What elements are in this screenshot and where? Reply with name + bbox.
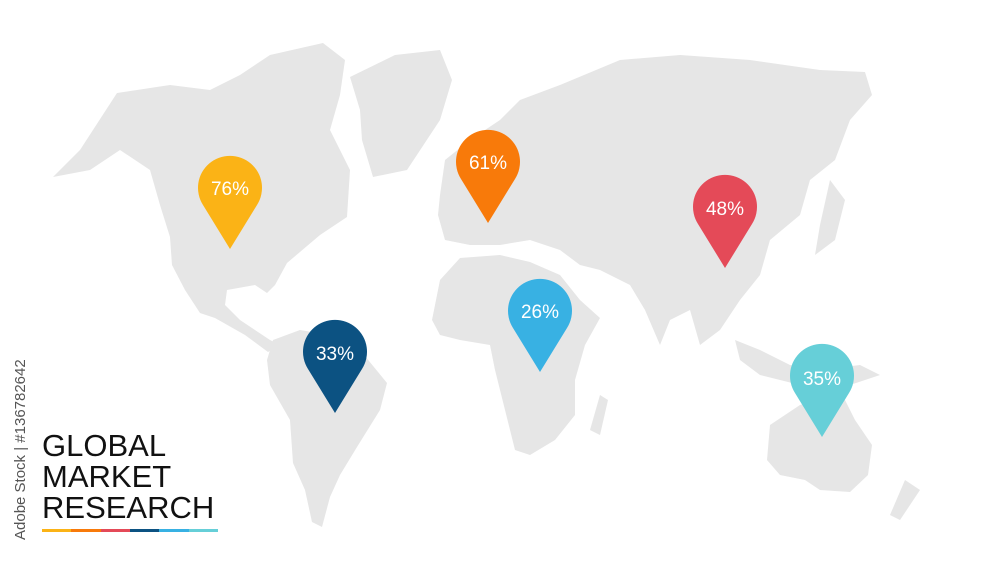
pin: 76% north america (198, 156, 262, 249)
continent: australia (767, 395, 872, 492)
pin: 61% europe: 61% (469, 153, 507, 174)
islands: japan (815, 180, 845, 255)
continent: greenland (350, 50, 452, 177)
title: MARKET (42, 459, 171, 494)
continent: south america (267, 330, 387, 527)
title: RESEARCH (42, 490, 214, 525)
watermark id vertical: Adobe Stock | #136782642 (12, 359, 29, 540)
title: GLOBAL (42, 428, 166, 463)
pin: 33% south america (303, 320, 367, 413)
title (42, 428, 214, 525)
pin: 33% south america: 33% (316, 344, 354, 365)
continent: eurasia (438, 55, 872, 345)
pin: 48% asia (693, 175, 757, 268)
pin: 76% north america: 76% (211, 179, 249, 200)
island: uk (455, 165, 475, 200)
continent: north america (53, 43, 350, 352)
pin: 48% asia: 48% (706, 199, 744, 220)
pin: 61% europe (456, 130, 520, 223)
pin: 26% africa: 26% (521, 302, 559, 323)
continent: africa (432, 255, 600, 455)
color bar (42, 529, 218, 532)
islands: indonesia (735, 340, 880, 385)
island: new zealand (890, 480, 920, 520)
island: madagascar (590, 395, 608, 435)
pin: 35% australia (790, 344, 854, 437)
pin: 35% australia: 35% (803, 369, 841, 390)
pin: 26% africa (508, 279, 572, 372)
